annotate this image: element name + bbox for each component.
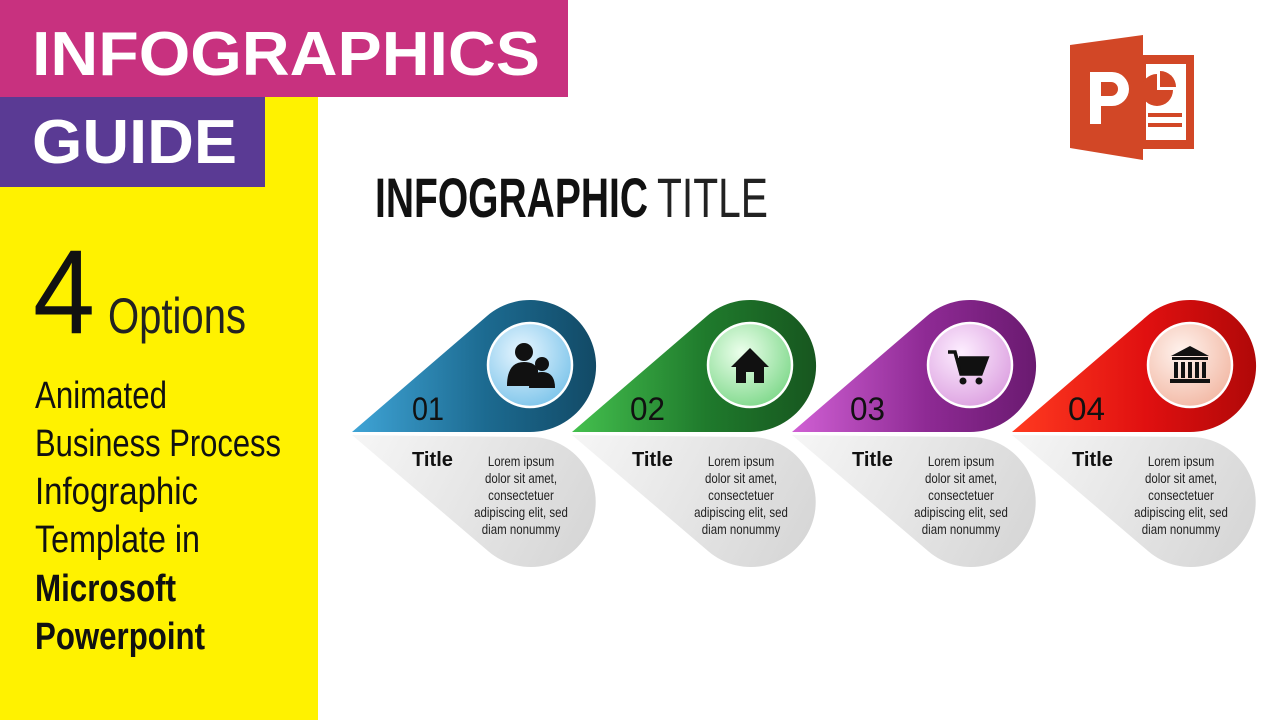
shape: step 03 top drop	[792, 300, 1036, 432]
title: TITLE	[657, 166, 768, 229]
shape: step 02 top drop	[572, 300, 816, 432]
text block: description: Animated	[35, 375, 167, 417]
text: step 02 title + body: diam nonummy	[702, 521, 781, 537]
step 03	[792, 300, 1036, 567]
shape: step 03 bottom gray	[792, 435, 1036, 567]
text block: description	[35, 375, 281, 658]
shape: step 01 bottom gray	[352, 435, 596, 567]
icon: house	[708, 323, 792, 407]
number 04: 04	[1068, 391, 1105, 427]
header banner: INFOGRAPHICS	[0, 0, 568, 97]
text: step 03 title + body: diam nonummy	[922, 521, 1001, 537]
text: step 02 title + body: Title	[632, 449, 673, 471]
header banner: INFOGRAPHICS: INFOGRAPHICS	[32, 20, 540, 89]
shape: step 04 top drop	[1012, 300, 1256, 432]
text: step 01 title + body: Title	[412, 449, 453, 471]
text: step 03 title + body: adipiscing elit, sed	[914, 504, 1008, 520]
text: step 01 title + body: Lorem ipsum	[488, 453, 554, 469]
text: step 01 title + body: adipiscing elit, sed	[474, 504, 568, 520]
number 01: 01	[412, 391, 444, 427]
text: step 03 title + body: dolor sit amet,	[925, 470, 997, 486]
icon: PowerPoint logo	[1070, 35, 1194, 160]
number 03: 03	[850, 391, 885, 427]
shape: step 01 top drop	[352, 300, 596, 432]
text block: description: Business Process	[35, 423, 281, 465]
text: step 04 title + body	[1072, 449, 1228, 537]
text: step 03 title + body: consectetuer	[928, 487, 995, 503]
text: step 04 title + body: diam nonummy	[1142, 521, 1221, 537]
header banner: GUIDE	[0, 97, 265, 187]
shape: step 04 bottom gray	[1012, 435, 1256, 567]
text: step 03 title + body	[852, 449, 1008, 537]
heading: 4 Options: 4	[33, 225, 95, 359]
title: INFOGRAPHIC	[375, 166, 648, 229]
text block: description: Infographic	[35, 471, 198, 513]
text: step 02 title + body: Lorem ipsum	[708, 453, 774, 469]
heading: 4 Options: Options	[108, 288, 246, 344]
step 01	[352, 300, 596, 567]
text: step 04 title + body: consectetuer	[1148, 487, 1215, 503]
text: step 03 title + body: Lorem ipsum	[928, 453, 994, 469]
number 02: 02	[630, 391, 665, 427]
text: step 03 title + body: Title	[852, 449, 893, 471]
shape: step 02 bottom gray	[572, 435, 816, 567]
text: step 04 title + body: dolor sit amet,	[1145, 470, 1217, 486]
text block: description: Powerpoint	[35, 616, 205, 658]
text: step 01 title + body: dolor sit amet,	[485, 470, 557, 486]
text: step 02 title + body: dolor sit amet,	[705, 470, 777, 486]
text: step 04 title + body: Title	[1072, 449, 1113, 471]
text: step 04 title + body: Lorem ipsum	[1148, 453, 1214, 469]
icon: cart	[928, 323, 1012, 407]
icon: bank	[1148, 323, 1232, 407]
text: step 01 title + body	[412, 449, 568, 537]
header banner: GUIDE: GUIDE	[32, 108, 237, 177]
text: step 02 title + body: adipiscing elit, sed	[694, 504, 788, 520]
step 02	[572, 300, 816, 567]
text: step 04 title + body: adipiscing elit, sed	[1134, 504, 1228, 520]
text: step 02 title + body: consectetuer	[708, 487, 775, 503]
text: step 01 title + body: diam nonummy	[482, 521, 561, 537]
icon: people	[488, 323, 572, 407]
text: step 02 title + body	[632, 449, 788, 537]
text: step 01 title + body: consectetuer	[488, 487, 555, 503]
panel: left yellow sidebar	[0, 97, 318, 720]
text block: description: Microsoft	[35, 568, 176, 610]
heading: 4 Options	[33, 225, 246, 359]
text block: description: Template in	[35, 519, 200, 561]
step 04	[1012, 300, 1256, 567]
